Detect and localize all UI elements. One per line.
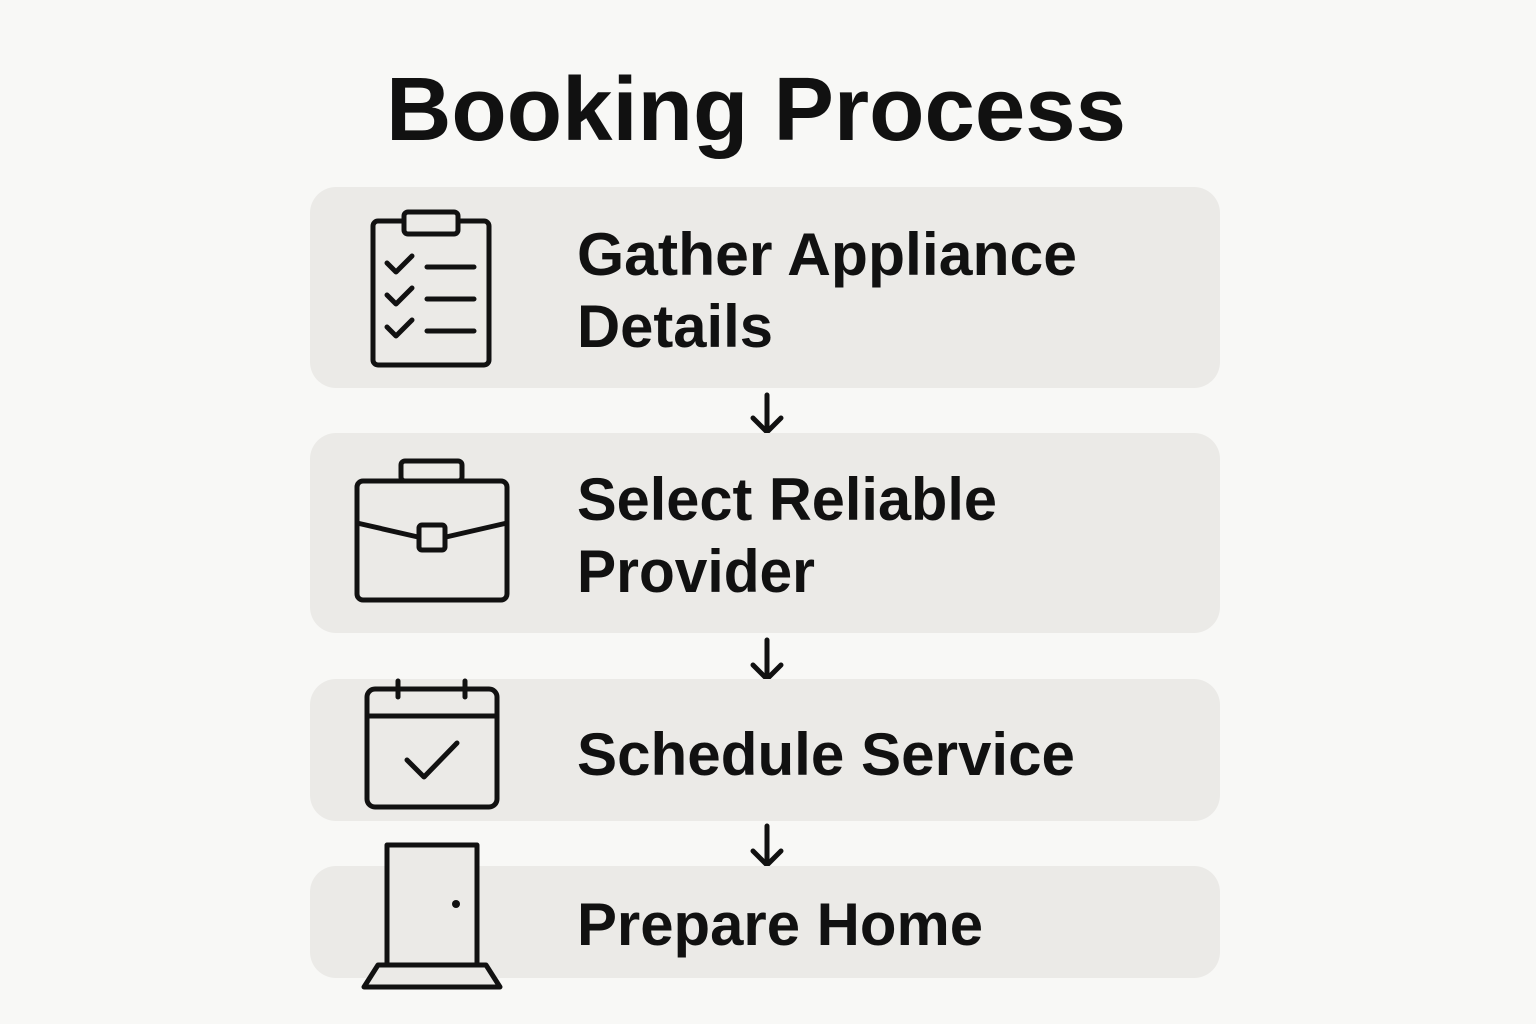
arrow 1 bbox=[753, 395, 781, 432]
title: Booking Process bbox=[386, 60, 1126, 160]
icon: door bbox=[364, 845, 500, 987]
icon: clipboard bbox=[373, 212, 489, 365]
panel: select reliable provider bbox=[310, 433, 1220, 633]
panel: gather appliance details bbox=[310, 187, 1220, 388]
panel: prepare home bbox=[310, 845, 1220, 987]
text: step 2: Select Reliable bbox=[577, 466, 997, 533]
icon: briefcase bbox=[357, 461, 507, 600]
panel: schedule service bbox=[310, 679, 1220, 821]
panel: select reliable provider: Provider bbox=[577, 538, 815, 605]
arrow 2 bbox=[753, 640, 781, 679]
icon: calendar bbox=[367, 681, 497, 807]
text: step 1: Gather Appliance bbox=[577, 221, 1077, 288]
text: step 4: Prepare Home bbox=[577, 891, 983, 958]
panel: gather appliance details: Details bbox=[577, 293, 773, 360]
arrow 3 bbox=[753, 826, 781, 865]
text: step 3: Schedule Service bbox=[577, 721, 1075, 788]
